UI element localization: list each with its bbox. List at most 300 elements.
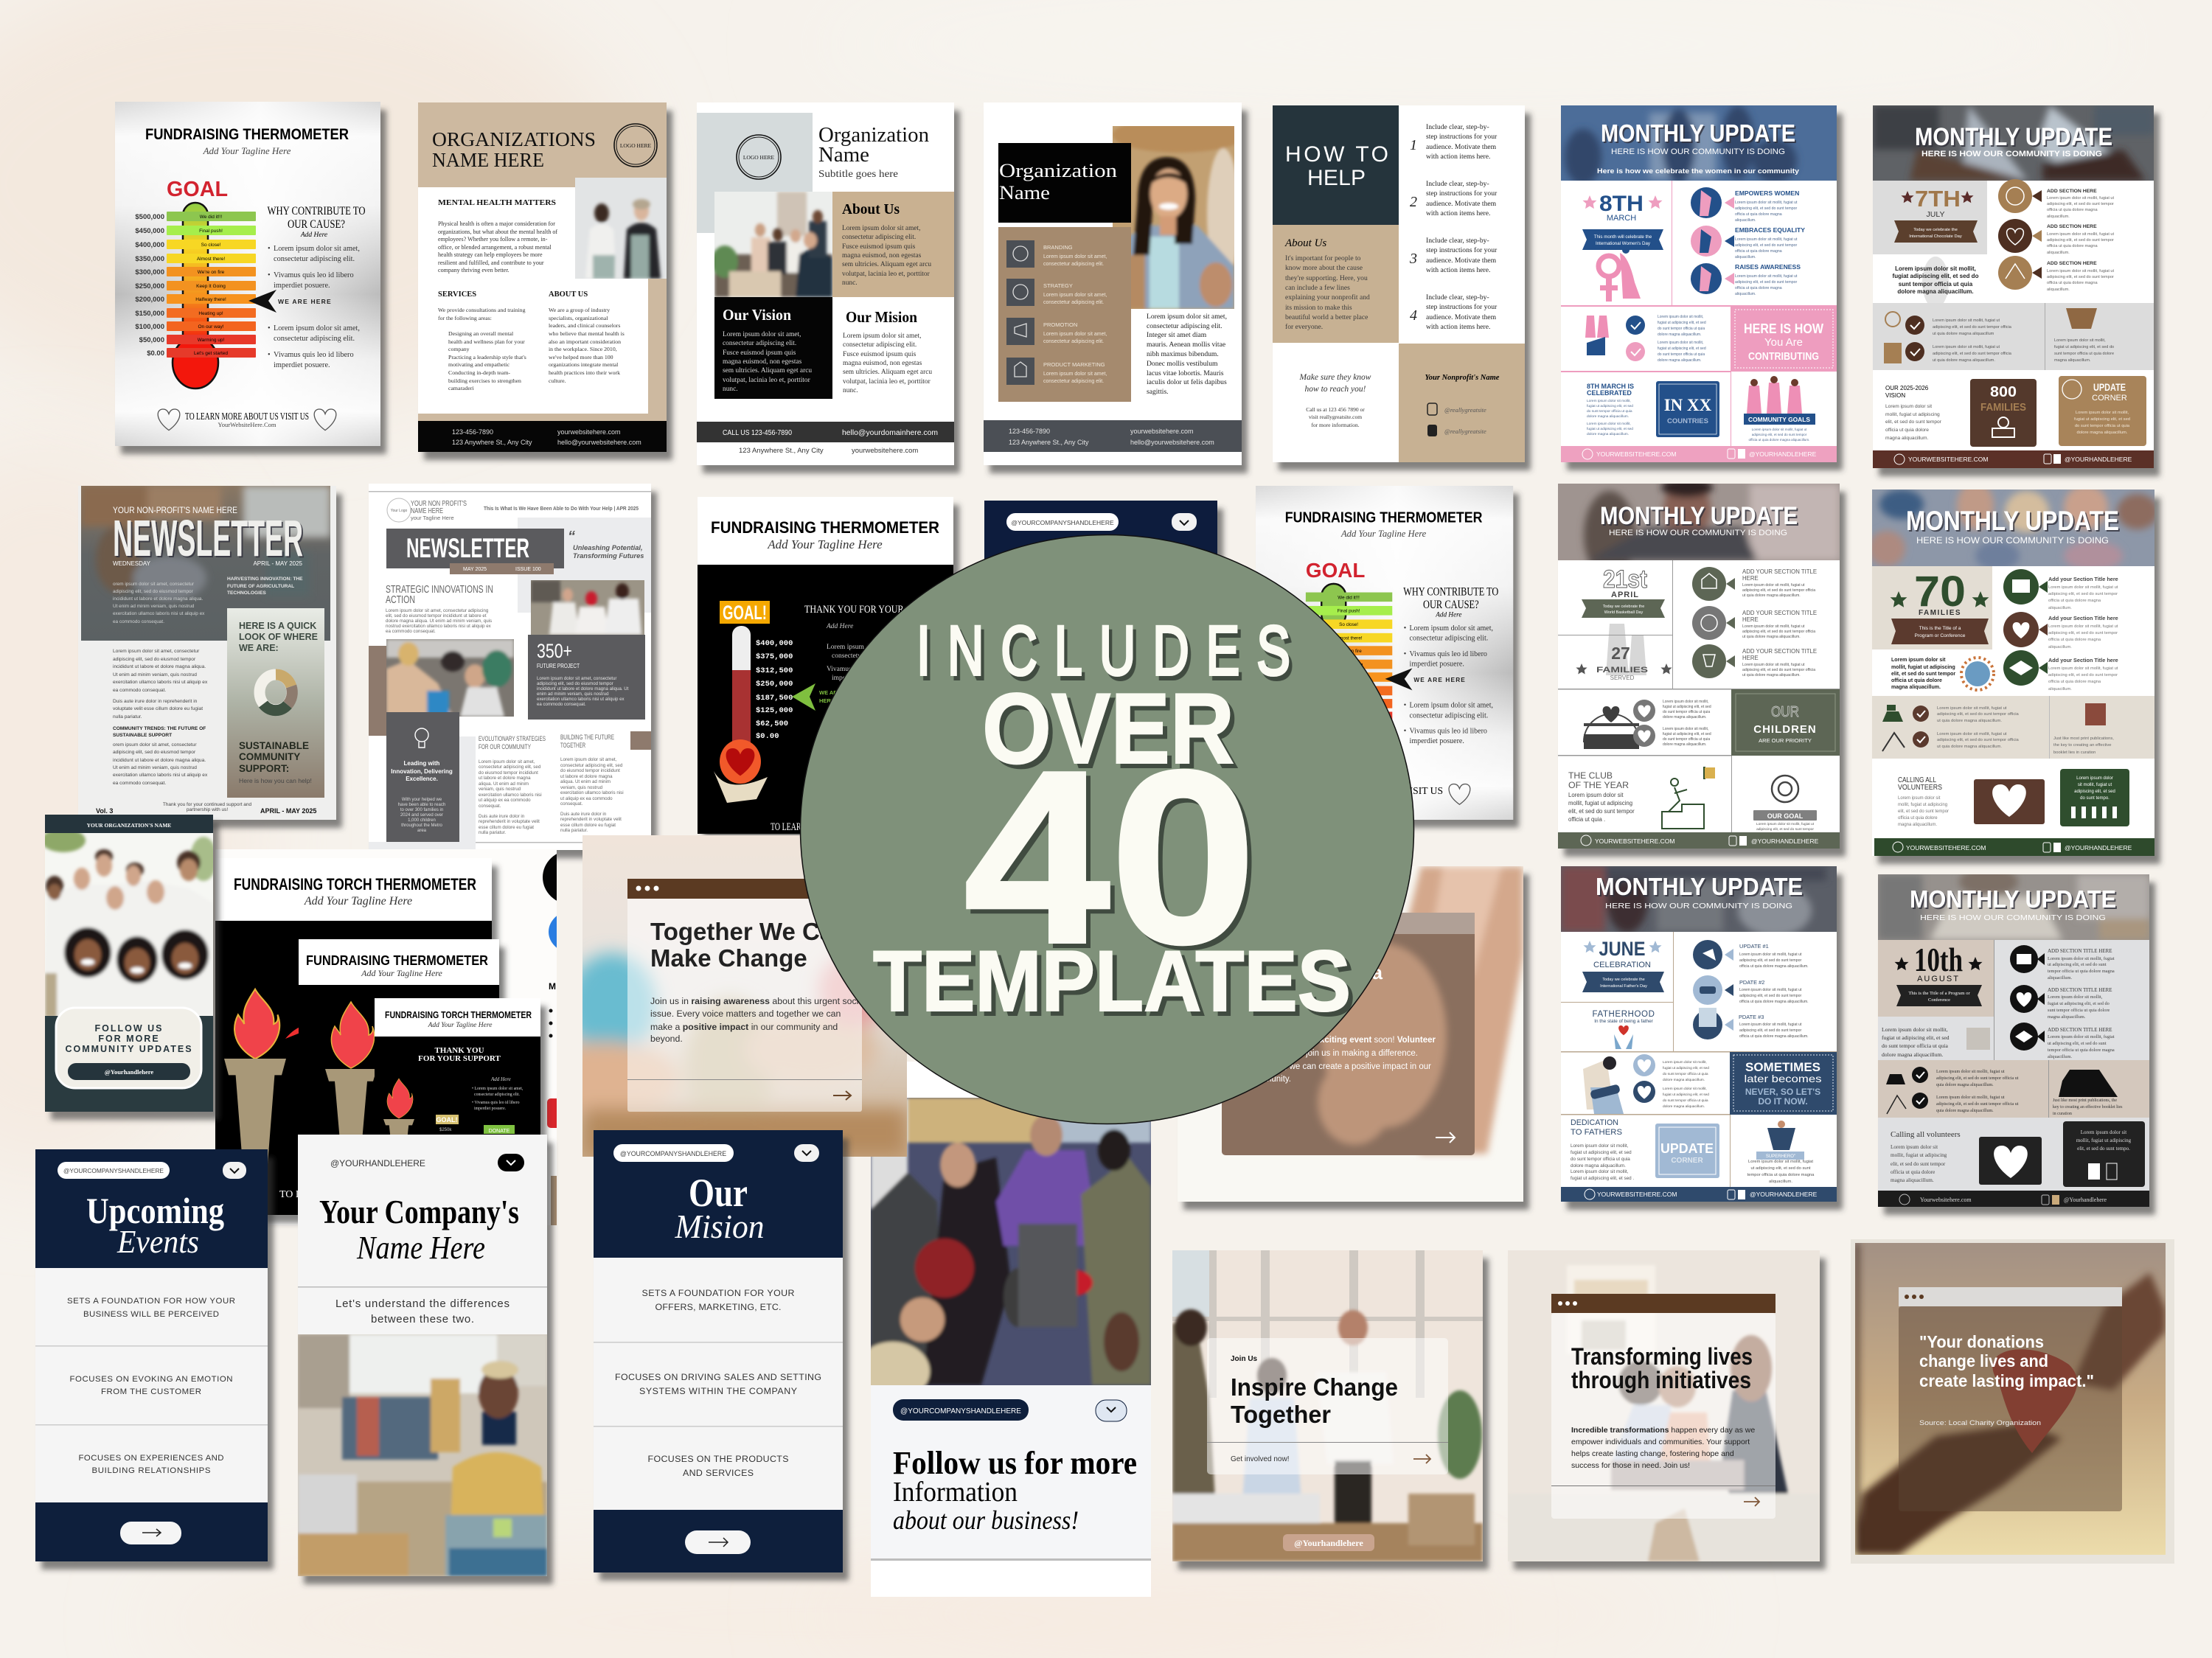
sustainable support text: SUSTAINABLE (239, 740, 309, 751)
section rows: adipiscing elit, et sed do sunt tempor officia (1742, 588, 1815, 593)
services panel (998, 227, 1131, 402)
contact bar: yourwebsitehere.com (852, 447, 918, 455)
goal logo: GOAL (1306, 559, 1365, 582)
card: monthly update green (1868, 482, 2158, 856)
title block: Organization (999, 160, 1117, 181)
footer call to action: YourWebsiteHere.Com (218, 421, 276, 428)
why contribute column: Vivamus quis leo id libero (1410, 728, 1487, 736)
green box: Lorem ipsum dolor (2076, 776, 2113, 781)
card: follow us community (41, 815, 217, 1112)
steps list: Include clear, step-by- (1426, 123, 1489, 131)
templates line: TEMPLATES (873, 933, 1351, 1029)
navy header (35, 1149, 268, 1268)
body columns: Ut enim ad minim veniam, quis nostrud (113, 672, 197, 678)
amounts (756, 639, 793, 741)
grey band: ut quia dolore magna aliquacillum. (1933, 358, 1995, 363)
goal ladder bars: Almost there! (1335, 636, 1363, 641)
updates rows: adipiscing elit, et sed do sunt tempor (1735, 280, 1797, 285)
grey band: Lorem ipsum dolor sit mollit, fugiat ut (1933, 345, 2000, 349)
body text: sagittis. (1147, 388, 1169, 396)
services and about columns: Practicing a leadership style that's (448, 354, 526, 360)
section rows: Lorem ipsum dolor sit mollit, fugiat ut (2047, 232, 2115, 237)
cover text: orem ipsum dolor sit amet, consectetur (113, 582, 195, 587)
body text: mauris. Aenean mollis vitae (1147, 341, 1225, 349)
footer bar: YOURWEBSITEHERE.COM (1906, 844, 1986, 851)
title (306, 953, 488, 978)
masthead: NAME HERE (411, 507, 443, 515)
follow card: FOR MORE (98, 1034, 160, 1044)
services panel: consectetur adipiscing elit. (1043, 300, 1104, 305)
visible heading letter: Be a (1342, 961, 1383, 983)
goal ladder bars: We did it!!! (1338, 595, 1360, 600)
children callout: CHILDREN (1753, 723, 1817, 736)
card: monthly update black (1878, 867, 2149, 1207)
rows: FOCUSES ON EVOKING AN EMOTION (69, 1375, 233, 1384)
goal tag: GOAL! (437, 1116, 457, 1124)
leading panel: have been able to reach (398, 803, 445, 807)
header photo (1561, 866, 1837, 932)
thank you text: imperdiet posuere. (832, 675, 884, 682)
services and about columns: culture. (549, 377, 566, 384)
updates rows (1691, 187, 1805, 296)
amounts scale: $100,000 (135, 323, 164, 331)
strategic innovations: STRATEGIC INNOVATIONS IN (386, 584, 493, 596)
torch with flame (325, 1002, 377, 1166)
father figure row: Lorem ipsum dolor sit mollit, (1663, 1087, 1707, 1091)
footer line: Vol. 3 (96, 807, 113, 815)
we are here arrow (1385, 668, 1466, 690)
thank you text: Vivamus quis leo id libero (827, 666, 900, 673)
stat panel 350: incididunt ut labore et dolore magna aliqua. Ut (537, 686, 629, 692)
heading block: HOW TO (1285, 142, 1388, 167)
goal badge: GOAL! (723, 602, 767, 624)
thank you text (804, 604, 945, 682)
amounts scale: $500,000 (135, 213, 164, 221)
heart group row: dolore magna aliquacillum. (1663, 715, 1706, 720)
heart group row: do sunt tempor officia ut quia (1663, 737, 1710, 742)
strategic innovations: elit, sed do eiusmod tempor incididunt ut labore et (386, 613, 487, 619)
intro text with globe: magna aliquacillum. (1891, 685, 1941, 690)
club of the year (1568, 767, 1715, 829)
female symbol with figure (1599, 246, 1641, 302)
card: upcoming events (35, 1149, 268, 1561)
footer bar: YOURWEBSITEHERE.COM (1908, 456, 1988, 463)
title: ORGANIZATIONS (432, 128, 596, 150)
photo: volunteers (531, 580, 644, 635)
services panel: STRATEGY (1043, 282, 1073, 289)
why contribute column (1403, 585, 1498, 745)
beige band: ut quia dolore magna aliquacillum. (1937, 745, 2002, 749)
body columns: ea commodo consequat. (113, 781, 166, 786)
tan band: adipiscing elit, et sed do sunt tempor officia ut (1936, 1076, 2019, 1081)
heading: Together (1231, 1401, 1331, 1428)
section rows: tempor officia ut quia dolore magna (2048, 969, 2115, 974)
updates rows: aliquacillum. (1735, 218, 1756, 223)
body text: issue. Every voice matters and together we can (650, 1009, 841, 1019)
update rows: adipiscing elit, et sed do sunt tempor (1739, 958, 1801, 963)
why contribute column: WHY CONTRIBUTE TO (267, 205, 366, 217)
services and about columns: health and wellness plan for your (448, 338, 525, 345)
rows: OFFERS, MARKETING, ETC. (655, 1302, 782, 1312)
title: Add Your Tagline Here (361, 968, 443, 978)
body columns: Duis aute irure dolor in reprehenderit in (113, 699, 198, 704)
steps list: audience. Motivate them (1426, 313, 1497, 321)
section rows: Add your Section Title here (2048, 576, 2118, 582)
section rows: aliquacillum. (2048, 1054, 2072, 1059)
grey band: Lorem ipsum dolor sit mollit, (2054, 338, 2106, 343)
celebrated block: fugiat ut adipiscing elit, et sed (1587, 404, 1633, 408)
families box: FAMILIES (1980, 401, 2026, 414)
handle pill (1006, 513, 1119, 531)
strategic innovations: dolore magna aliqua. Ut enim ad minim veniam, quis (386, 619, 492, 624)
newsletter title block: ISSUE 100 (515, 567, 541, 572)
section rows: officia ut quia dolore magna (2047, 281, 2098, 285)
why contribute column: Add Here (1435, 611, 1461, 619)
header photo (1872, 490, 2154, 566)
community goals: officia ut quia dolore magna aliquacillum. (1749, 438, 1809, 442)
amounts scale: $50,000 (139, 336, 164, 344)
photo: office meeting (714, 192, 832, 297)
header photo (1561, 105, 1837, 181)
our vision panel: Fusce euismod ipsum quis (723, 349, 796, 357)
title (234, 875, 476, 908)
cover text: TECHNOLOGIES (227, 591, 266, 596)
why contribute column: Lorem ipsum dolor sit amet, (274, 324, 360, 332)
date block: 10th (1914, 941, 1963, 978)
handle pill (893, 1399, 1029, 1421)
title: FUNDRAISING THERMOMETER (711, 518, 939, 537)
about us panel: its mission to make this (1285, 304, 1352, 312)
about us panel: nunc. (842, 279, 858, 287)
beige band: Just like most print publications, (2053, 736, 2114, 741)
body text: Together, we can create a positive impact in our (1252, 1062, 1431, 1071)
why contribute column: Lorem ipsum dolor sit amet, (1410, 624, 1493, 633)
amounts: $312,500 (756, 666, 793, 675)
footer text: TO L (279, 1189, 302, 1200)
about us panel: magna euismod, non egestas (842, 252, 922, 260)
section rows: tempor officia ut quia dolore magna (2048, 1048, 2115, 1053)
leading panel: Innovation, Delivering (391, 768, 453, 775)
title: Name (818, 144, 869, 167)
tan band: Lorem ipsum dolor sit mollit, fugiat ut (1936, 1069, 2005, 1074)
section rows: officia ut quia dolore magna (2048, 680, 2101, 684)
steps list: Include clear, step-by- (1426, 293, 1489, 302)
section rows (2003, 569, 2118, 692)
date block: AUGUST (1917, 975, 1960, 983)
leading panel: 1,000 children (408, 818, 436, 823)
thank you text: Lorem ipsum dolor sit amet, (827, 644, 906, 651)
families served: 27 (1611, 644, 1630, 663)
date block: Today we celebrate the (1602, 978, 1645, 982)
section rows: ADD SECTION HERE (2047, 189, 2097, 194)
photo: smiling woman (1113, 126, 1234, 309)
volunteers block: mollit, fugiat ut adipiscing (1898, 803, 1947, 807)
vision block: Lorem ipsum dolor sit (1885, 404, 1932, 409)
nonprofit name panel: @reallygreatsite (1444, 428, 1486, 435)
column articles: reprehenderit in voluptate velit (560, 817, 622, 822)
our vision panel: consectetur adipiscing elit. (723, 340, 796, 347)
bottom bar with arrow (35, 1502, 268, 1561)
header title (1906, 506, 2119, 546)
body columns: adipiscing elit, sed do eiusmod tempor (113, 657, 196, 662)
amounts scale: $150,000 (135, 310, 164, 318)
why contribute column: Vivamus quis leo id libero (274, 351, 354, 359)
date block (1873, 181, 1987, 254)
section rows: Lorem ipsum dolor sit mollit, fugiat ut (1742, 624, 1805, 629)
cover text: FUTURE OF AGRICULTURAL (227, 584, 294, 589)
why contribute column: OUR CAUSE? (1423, 599, 1479, 611)
side accents (369, 646, 651, 750)
services and about columns: specialists, organizational (549, 315, 608, 321)
update corner box: Lorem ipsum dolor sit mollit, (2076, 411, 2129, 415)
heading (650, 918, 848, 972)
card: how to help (1273, 105, 1525, 462)
quote text: create lasting impact." (1919, 1371, 2094, 1390)
mental health section: health strategy can help employees be more (438, 251, 543, 258)
check rows: do sunt tempor officia ut quia (1658, 327, 1705, 331)
families served: SERVED (1610, 675, 1635, 681)
steps list: step instructions for your (1426, 303, 1498, 311)
update rows: officia ut quia dolore magna aliquacillum. (1739, 1000, 1809, 1004)
club of the year: mollit, fugiat ut adipiscing (1568, 800, 1632, 807)
intro text with globe (1891, 658, 1994, 690)
services and about columns: for the following areas: (438, 315, 492, 321)
photo: volunteers in bright room (1172, 1250, 1483, 1561)
amounts: $187,500 (756, 694, 793, 703)
title block: Name (999, 182, 1050, 203)
why contribute column: Vivamus quis leo id libero (274, 271, 354, 279)
body text: Donec mollis vestibulum (1147, 360, 1218, 368)
date block: This month will celebrate the (1594, 234, 1652, 240)
goal tag: $250k (439, 1128, 452, 1132)
column articles: ut labore et dolore magna (560, 774, 613, 779)
title (432, 128, 596, 171)
stats gradient panel (227, 608, 324, 798)
brown panel (1222, 913, 1475, 1155)
steps list: with action items here. (1426, 153, 1490, 161)
grey band: magna aliquacillum. (2054, 358, 2091, 363)
cover text: WEDNESDAY (113, 560, 151, 567)
section rows: magna aliquacillum. (2048, 1014, 2086, 1020)
vision block: VISION (1885, 392, 1905, 399)
services and about columns: organizations integrate mental (549, 361, 619, 368)
intro text: dolore magna aliquacillum. (1882, 1051, 1943, 1058)
beige band (1872, 696, 2154, 759)
pink callout: CONTRIBUTING (1748, 350, 1819, 363)
heading: Follow us for more (893, 1445, 1137, 1481)
card: inspire change together (1172, 1250, 1483, 1561)
why contribute column: imperdiet posuere. (274, 282, 330, 290)
section rows: Lorem ipsum dolor sit mollit, fugiat (2048, 956, 2115, 961)
update rows: PDATE #3 (1739, 1014, 1764, 1020)
update rows: UPDATE #1 (1739, 943, 1769, 950)
mental health section: MENTAL HEALTH MATTERS (438, 198, 556, 207)
card: white background with partial social card (215, 849, 557, 1225)
photo: kitchen meeting (1508, 1265, 1820, 1561)
section rows: adipiscing elit, et sed do sunt tempor (2048, 592, 2118, 596)
sustainable support text: COMMUNITY (239, 751, 300, 762)
volunteers block: magna aliquacillum. (1891, 1177, 1934, 1183)
steps list: audience. Motivate them (1426, 143, 1497, 151)
footer bar: @YOURHANDLEHERE (2065, 844, 2132, 851)
why contribute column: imperdiet posuere. (1410, 660, 1464, 668)
date block: This is the Title of a Program or (1908, 991, 1970, 996)
heading (1571, 1343, 1753, 1393)
black box (2063, 1121, 2145, 1187)
title: Add Your Tagline Here (767, 537, 883, 551)
section rows: ADD YOUR SECTION TITLE (1742, 568, 1817, 575)
tan band: quia dolore magna aliquacillum. (1936, 1083, 1994, 1087)
section rows: adipiscing elit, et sed do sunt tempor (2048, 673, 2118, 678)
club of the year: OF THE YEAR (1568, 780, 1629, 790)
about us panel: volutpat, lacinia leo et, porttitor (842, 271, 931, 278)
handle and chevron: @YOURHANDLEHERE (330, 1158, 425, 1168)
footer contact bar: 123-456-7890 (452, 428, 493, 436)
father figure row: dolore magna aliquacillum. (1663, 1078, 1705, 1082)
goal ladder bars: Let's get started (194, 351, 228, 356)
services and about columns: health practices into their work (549, 369, 620, 376)
footer bar: @YOURHANDLEHERE (1749, 450, 1817, 458)
superhero block: Lorem ipsum dolor sit mollit, fugiat (1748, 1160, 1813, 1164)
body text: Lorem ipsum dolor sit amet, (1147, 313, 1227, 321)
services and about columns: We provide consultations and training (438, 307, 526, 313)
our mision text: Our Mision (846, 308, 917, 326)
card: handle header behind badge (984, 501, 1217, 589)
children callout (1731, 689, 1840, 756)
black box: mollit, fugiat ut adipiscing (2076, 1138, 2132, 1143)
number 40: 40 (964, 720, 1256, 995)
heading: Transforming lives (1571, 1343, 1753, 1370)
families block: 70 (1914, 568, 1966, 616)
photo: support circle (871, 1098, 1151, 1385)
cover text (113, 505, 303, 624)
badge: includes over 40 templates (801, 535, 1414, 1124)
section rows (1998, 179, 2115, 292)
date block (1582, 938, 1664, 992)
header title: Here is how we celebrate the women in our community (1597, 167, 1800, 175)
volunteers block (1891, 1130, 2042, 1185)
about us panel (832, 192, 954, 297)
why contribute column: consectetur adipiscing elit. (1410, 711, 1488, 720)
father figure row: do sunt tempor officia ut quia (1663, 1072, 1708, 1076)
donut chart (260, 675, 292, 711)
section rows: officia ut quia dolore magna (2047, 208, 2098, 212)
beige band: the key to creating an effective (2053, 743, 2112, 748)
title: Add Your Tagline Here (304, 895, 412, 908)
photo: volunteers group (45, 833, 213, 1016)
section rows: officia ut quia dolore magna (2048, 638, 2101, 642)
why contribute column: WHY CONTRIBUTE TO (1403, 585, 1498, 598)
services panel: Lorem ipsum dolor sit amet, (1043, 254, 1107, 260)
section rows: ut adipiscing elit, et sed do sunt (2048, 1041, 2107, 1046)
section rows: Lorem ipsum dolor sit mollit, fugiat ut (1742, 663, 1805, 667)
section rows: aliquacillum. (2047, 288, 2070, 292)
children callout: ARE OUR PRIORITY (1759, 737, 1812, 744)
card: monthly update grey (1558, 477, 1840, 849)
heart group row: dolore magna aliquacillum. (1663, 742, 1706, 747)
services and about columns: in the workplace. Since 2010, (549, 346, 617, 352)
our mision text: volutpat, lacinia leo et, porttitor (843, 378, 931, 386)
section rows: adipiscing elit, et sed do sunt tempor (2047, 202, 2114, 206)
strategic innovations: ea commodo consequat. (386, 629, 436, 634)
families block: Program or Conference (1915, 633, 1966, 638)
body text: Integer sit amet diam (1147, 331, 1207, 339)
subtitle (335, 1298, 509, 1326)
heading: Join Us (1231, 1355, 1258, 1363)
header title: HERE IS HOW OUR COMMUNITY IS DOING (1609, 529, 1787, 537)
updates rows: officia ut quia dolore magna (1735, 212, 1782, 217)
fatherhood block: FATHERHOOD (1592, 1010, 1655, 1019)
title (675, 1171, 764, 1245)
column articles: ut aliquip ex ea commodo (479, 798, 531, 803)
updates rows: aliquacillum. (1735, 255, 1756, 260)
why contribute column: • (1404, 702, 1406, 710)
nonprofit name panel (1399, 344, 1525, 462)
updates rows: officia ut quia dolore magna (1735, 286, 1782, 290)
contact bar: hello@yourdomainhere.com (842, 429, 938, 437)
about us panel: consectetur adipiscing elit. (842, 234, 916, 241)
our goal block (1753, 776, 1817, 832)
follow card (56, 1008, 201, 1088)
section rows: Lorem ipsum dolor sit mollit, fugiat ut (2048, 585, 2118, 590)
newsletter title block: NEWSLETTER (406, 533, 529, 563)
card: fundraising thermometer white copy (1256, 486, 1513, 820)
why contribute column: Vivamus quis leo id libero (1410, 650, 1487, 658)
heading: Inspire Change (1231, 1373, 1398, 1401)
why contribute column: • (268, 351, 271, 359)
amounts: $62,500 (756, 720, 788, 728)
mental health section: resilient and fulfilled, and contribute to your (438, 260, 544, 266)
father figure row: fugiat ut adipiscing elit, et sed (1663, 1066, 1709, 1070)
intro text with globe: officia ut quia dolore (1891, 678, 1942, 683)
thank you text (418, 1046, 501, 1063)
tan band: in curation (2053, 1112, 2072, 1116)
card: transforming lives (1508, 1250, 1820, 1561)
why contribute column: Lorem ipsum dolor sit amet, (274, 245, 360, 253)
update rows: Lorem ipsum dolor sit mollit, fugiat ut (1739, 952, 1802, 957)
cover text: ea commodo consequat. (113, 619, 164, 624)
dedication block: CORNER (1671, 1157, 1703, 1165)
stat panel 350: ea commodo consequat. (537, 702, 586, 707)
celebrated block: dolore magna aliquacillum. (1587, 414, 1629, 419)
why contribute column: consectetur adipiscing elit. (1410, 635, 1488, 643)
body text: helps create lasting change, fostering hope and (1571, 1449, 1734, 1458)
quote: Unleashing Potential, (573, 544, 643, 551)
dedication block: Lorem ipsum dolor sit mollit, (1571, 1143, 1629, 1149)
thermometer graphic (173, 203, 218, 389)
volunteers block: mollit, fugiat ut adipiscing (1891, 1152, 1947, 1158)
goal ladder bars: Almost there! (197, 257, 225, 262)
services and about columns: leaders, and clinical counselors (549, 322, 620, 329)
strategic innovations: ACTION (386, 594, 415, 606)
heading (893, 1445, 1137, 1535)
footer bar: Yourwebsitehere.com (1920, 1197, 1972, 1203)
top bar (45, 815, 213, 833)
heading: Together We Can (650, 918, 848, 945)
strategic innovations: nostrud exercitation ullamco laboris nisi ut aliquip ex (386, 624, 492, 629)
cover text: Ut enim ad minim veniam, quis nostrud (113, 604, 195, 609)
cover text: exercitation ullamco laboris nisi ut aliquip ex (113, 611, 205, 616)
our vision panel (714, 297, 832, 399)
cover text: adipiscing elit, sed do eiusmod tempor (113, 589, 194, 594)
body columns (113, 649, 208, 786)
header photo (1558, 484, 1840, 560)
mental health section (438, 198, 557, 274)
title: FUNDRAISING THERMOMETER (145, 126, 349, 143)
footer line (96, 802, 316, 815)
beige band: ut quia dolore magna aliquacillum. (1937, 719, 2002, 723)
rows (594, 1288, 843, 1478)
